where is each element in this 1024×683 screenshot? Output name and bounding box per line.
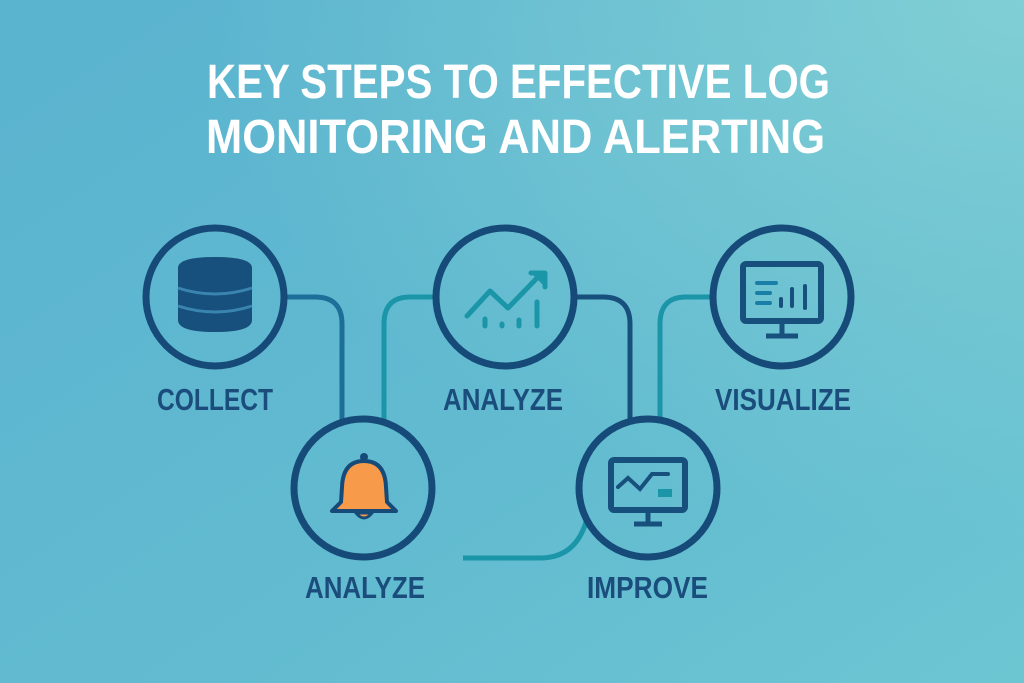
step: alert: [294, 419, 432, 605]
label: analyze (top): ANALYZE: [443, 382, 563, 417]
label: collect: COLLECT: [157, 382, 273, 417]
icon: bell: [332, 453, 396, 518]
icon: monitor with bars: [743, 264, 821, 336]
label: improve: IMPROVE: [587, 570, 708, 605]
icon: database: [178, 257, 252, 332]
icon: trend chart: [467, 273, 545, 326]
label: visualize: VISUALIZE: [715, 382, 851, 417]
title: [206, 56, 830, 164]
step: improve: [579, 419, 717, 605]
label: analyze (bottom): ANALYZE: [305, 570, 425, 605]
step: analyze: [436, 228, 574, 417]
step: visualize: [713, 228, 851, 417]
connector: visualize to improve: [660, 297, 710, 420]
icon: monitor with line chart: [611, 460, 685, 524]
connector: analyze to improve: [577, 297, 630, 420]
connector: bottom line to improve: [463, 522, 586, 558]
title: MONITORING AND ALERTING: [206, 111, 825, 164]
connector: collect to alert: [287, 297, 342, 420]
title: KEY STEPS TO EFFECTIVE LOG: [207, 56, 830, 109]
connector: analyze to alert: [384, 297, 435, 420]
step: collect: [146, 228, 284, 417]
